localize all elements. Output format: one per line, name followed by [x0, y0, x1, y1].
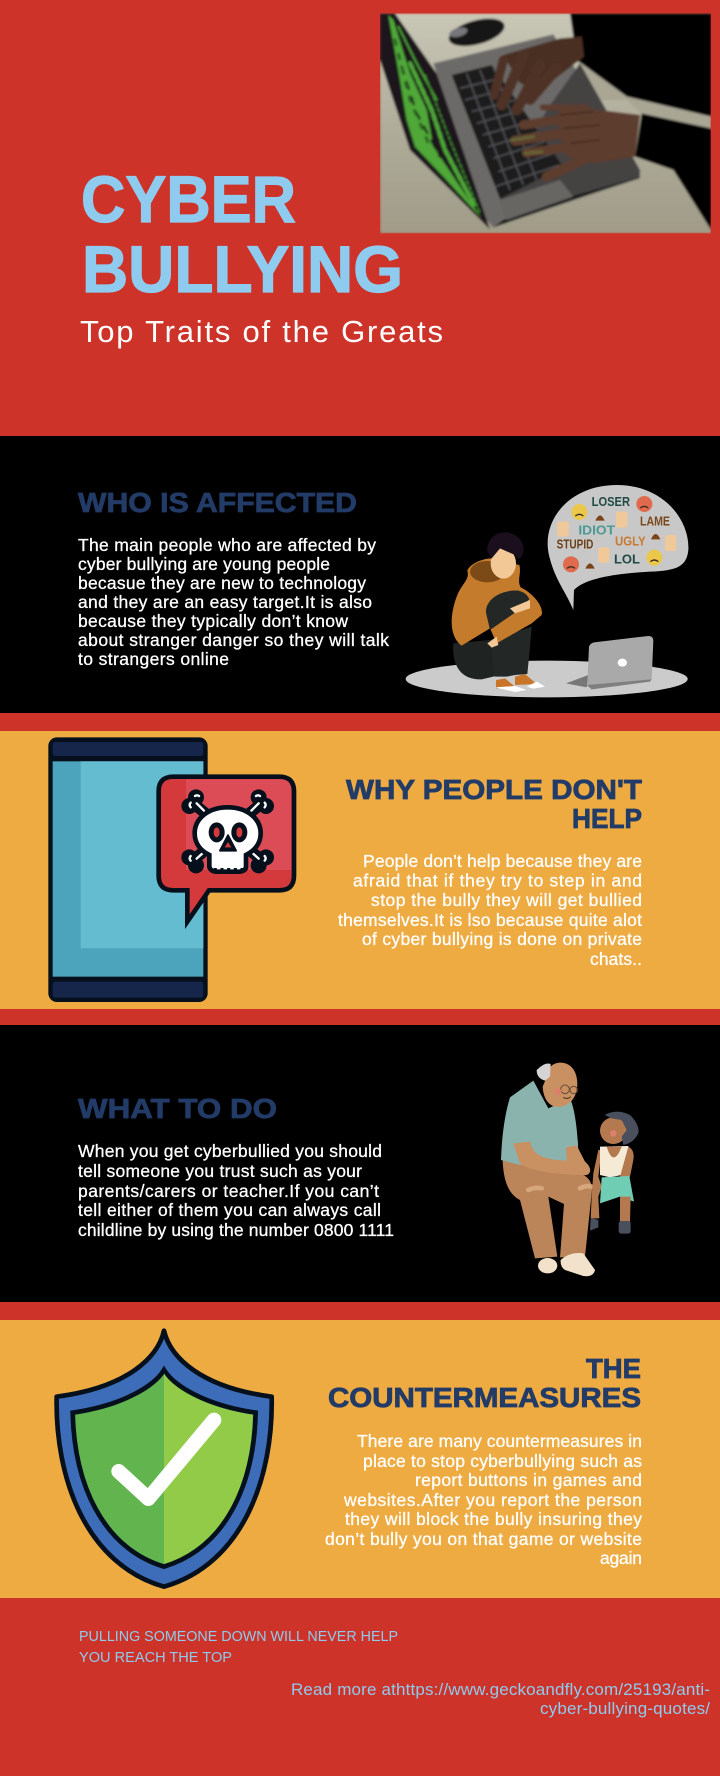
heading: why people don't help: WHY PEOPLE DON'T — [346, 774, 642, 805]
illustration: sad teen with phone and speech bubble: IDIOT — [578, 523, 615, 538]
heading: the countermeasures: THE — [586, 1353, 641, 1384]
subtitle: Top Traits of the Greats — [80, 314, 443, 349]
illustration: sad teen with phone and speech bubble: LOL — [614, 552, 640, 567]
quote — [79, 1628, 398, 1666]
panel: why people don't help — [0, 731, 720, 1009]
heading: the countermeasures — [328, 1353, 641, 1413]
text block: who is affected: becasue they are new to technology — [78, 573, 366, 593]
heading: what to do: WHAT TO DO — [78, 1093, 277, 1124]
panel: who is affected — [0, 436, 720, 713]
source link — [291, 1680, 710, 1718]
text block: what to do: childline by using the number 0800 1111 — [78, 1220, 394, 1240]
text block: who is affected: about stranger danger so they will talk — [78, 630, 389, 650]
icon: phone with skull message — [48, 737, 294, 1002]
heading: why people don't help: HELP — [572, 803, 642, 834]
quote: PULLING SOMEONE DOWN WILL NEVER HELP — [79, 1628, 398, 1645]
heading: who is affected: WHO IS AFFECTED — [78, 487, 357, 518]
text block: the countermeasures: again — [600, 1548, 642, 1568]
text block: who is affected: to strangers online — [78, 649, 229, 669]
text block: the countermeasures — [325, 1431, 642, 1568]
title: CYBER — [81, 162, 296, 236]
illustration: sad teen with phone and speech bubble: STUPID — [557, 537, 594, 552]
quote: YOU REACH THE TOP — [79, 1649, 232, 1666]
panel: what to do — [0, 1025, 720, 1302]
text block: who is affected: and they are an easy target.It is also — [78, 592, 372, 612]
title — [81, 162, 403, 306]
text block: why people don't help: People don’t help because they are — [363, 851, 642, 871]
text block: the countermeasures: place to stop cyberbullying such as — [363, 1451, 642, 1471]
text block: why people don't help: stop the bully they will get bullied — [371, 890, 642, 910]
illustration: grandfather and child — [501, 1063, 639, 1276]
text block: the countermeasures: There are many countermeasures in — [357, 1431, 642, 1451]
text block: who is affected — [78, 535, 389, 669]
icon: shield with check mark — [57, 1331, 272, 1587]
text block: why people don't help: themselves.It is lso because quite alot — [338, 910, 642, 930]
heading: why people don't help — [346, 774, 642, 834]
text block: why people don't help: afraid that if they try to step in and — [353, 870, 642, 890]
text block: the countermeasures: they will block the bully insuring they — [345, 1509, 642, 1529]
source link: Read more athttps://www.geckoandfly.com/25193/anti- — [291, 1680, 710, 1699]
illustration: sad teen with phone and speech bubble: LAME — [640, 513, 670, 528]
illustration: sad teen with phone and speech bubble: LOSER — [592, 494, 630, 509]
text block: who is affected: The main people who are affected by — [78, 535, 376, 555]
text block: who is affected: because they typically don’t know — [78, 611, 348, 631]
source link: cyber-bullying-quotes/ — [540, 1699, 710, 1718]
text block: who is affected: cyber bullying are young people — [78, 554, 330, 574]
photo: hands typing on laptop — [380, 13, 711, 233]
text block: why people don't help — [338, 851, 642, 969]
text block: the countermeasures: report buttons in games and — [415, 1470, 642, 1490]
title: BULLYING — [82, 232, 403, 306]
heading: the countermeasures: COUNTERMEASURES — [328, 1382, 641, 1413]
illustration: sad teen with phone and speech bubble — [406, 485, 688, 697]
text block: what to do: When you get cyberbullied you should — [78, 1141, 382, 1161]
text block: why people don't help: chats.. — [590, 949, 642, 969]
text block: what to do: tell someone you trust such as your — [78, 1161, 362, 1181]
text block: what to do: tell either of them you can always call — [78, 1200, 381, 1220]
text block: the countermeasures: websites.After you report the person — [343, 1490, 642, 1510]
text block: why people don't help: of cyber bullying is done on private — [362, 929, 642, 949]
text block: the countermeasures: don’t bully you on that game or website — [325, 1529, 642, 1549]
text block: what to do — [78, 1141, 394, 1240]
panel: the countermeasures — [0, 1320, 720, 1598]
illustration: sad teen with phone and speech bubble: UGLY — [615, 534, 646, 549]
text block: what to do: parents/carers or teacher.If you can’t — [78, 1181, 379, 1201]
